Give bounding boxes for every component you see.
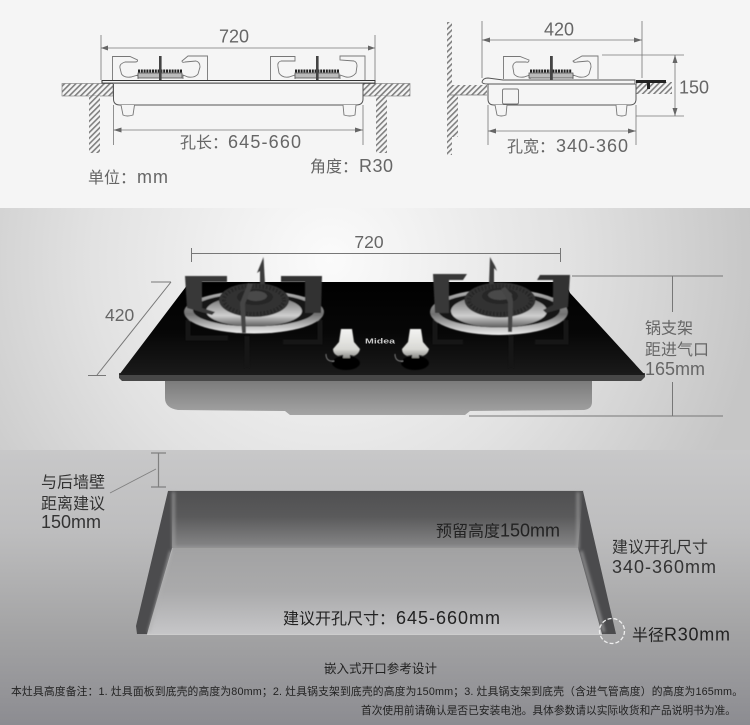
cooktop plate — [482, 78, 635, 84]
label: opening length: 建议开孔尺寸： — [283, 610, 395, 628]
label unit: 单位： — [88, 169, 136, 187]
left burner — [112, 56, 208, 80]
product: gas cooktop — [119, 257, 645, 415]
counter and cabinet hatch — [62, 84, 410, 153]
icon: corner radius circle — [600, 618, 624, 644]
label: corner radius: R30mm — [664, 624, 730, 644]
label angle: R30 — [359, 156, 393, 176]
panel: background top — [0, 0, 750, 208]
glass edge — [119, 373, 645, 381]
label: rear wall distance: 150mm — [41, 512, 101, 532]
panel: background bottom — [0, 450, 750, 725]
label: support height: 锅支架 — [645, 320, 693, 338]
label unit: mm — [137, 167, 168, 187]
cutout pit — [136, 490, 616, 634]
label: support height: 距进气口 — [645, 341, 709, 359]
burner crown — [464, 282, 536, 318]
label hole width: 340-360 — [556, 136, 628, 156]
dimension: support height — [469, 276, 723, 416]
label: opening length: 645-660mm — [396, 608, 500, 628]
steel body — [165, 380, 592, 415]
pan support reflection — [188, 320, 320, 368]
left burner — [184, 257, 324, 368]
dimension hole length — [114, 105, 363, 145]
label: rear wall distance: 与后墙壁 — [41, 472, 105, 492]
diagram: front cross-section — [62, 26, 410, 187]
burner — [504, 56, 598, 80]
floor — [147, 548, 602, 634]
pan support reflection — [435, 320, 566, 368]
label 720: 720 — [219, 26, 249, 46]
right burner — [430, 257, 570, 368]
cooktop body — [488, 84, 636, 105]
pan supports — [185, 276, 227, 315]
label: rear wall distance — [41, 472, 105, 532]
label: opening width: 建议开孔尺寸 — [612, 538, 708, 556]
left wall — [136, 491, 172, 634]
cooktop body — [114, 84, 363, 105]
dimension 420 — [482, 21, 642, 78]
label hole width: 孔宽： — [507, 138, 555, 156]
cooktop plate — [102, 80, 375, 83]
label: opening width: 340-360mm — [612, 557, 716, 577]
label 420: 420 — [544, 20, 574, 40]
dimension 720 — [101, 35, 375, 80]
label hole length: 645-660 — [228, 132, 301, 152]
right burner — [270, 56, 365, 80]
left knob — [326, 329, 360, 370]
note: usage remarks: 首次使用前请确认是否已安装电池。具体参数请以实际收货和产品说明书为准。 — [361, 704, 736, 717]
label 150: 150 — [679, 78, 709, 98]
label: opening width — [612, 538, 716, 577]
caption: 嵌入式开口参考设计 — [324, 661, 437, 676]
burner crown — [219, 283, 289, 317]
note: height remarks: 本灶具高度备注：1. 灶具面板到底壳的高度为80mm；2. 灶具锅支架到底壳的高度为150mm；3. 灶具锅支架到底壳（含进气管高度）的高度为165mm。 — [11, 684, 743, 698]
label: rear wall distance: 距离建议 — [41, 495, 105, 513]
brand logo: Midea — [365, 338, 395, 346]
label: 420: 420 — [105, 305, 134, 325]
dimension: depth 420 — [88, 282, 171, 376]
label hole length: 孔长： — [180, 134, 228, 152]
label: support height — [645, 320, 709, 379]
dimension 150 — [602, 55, 684, 116]
label: reserved height: 预留高度 — [436, 522, 500, 540]
label angle: 角度： — [310, 158, 358, 176]
diagram: side cross-section — [447, 20, 709, 156]
right knob — [395, 329, 429, 370]
label: support height: 165mm — [645, 359, 705, 379]
dimension hole width — [488, 105, 636, 145]
dimension: width 720 — [191, 248, 560, 262]
dimension: rear wall gap — [110, 453, 166, 493]
back wall — [168, 491, 583, 548]
wall and counter hatch — [447, 22, 672, 155]
panel: background middle — [0, 208, 750, 450]
label: reserved height: 150mm — [500, 520, 560, 540]
label: 720: 720 — [354, 232, 384, 252]
soft highlights — [149, 492, 604, 632]
glass top — [119, 282, 645, 375]
right wall — [578, 491, 616, 634]
pan supports — [433, 274, 467, 313]
label: corner radius: 半径 — [632, 626, 664, 644]
